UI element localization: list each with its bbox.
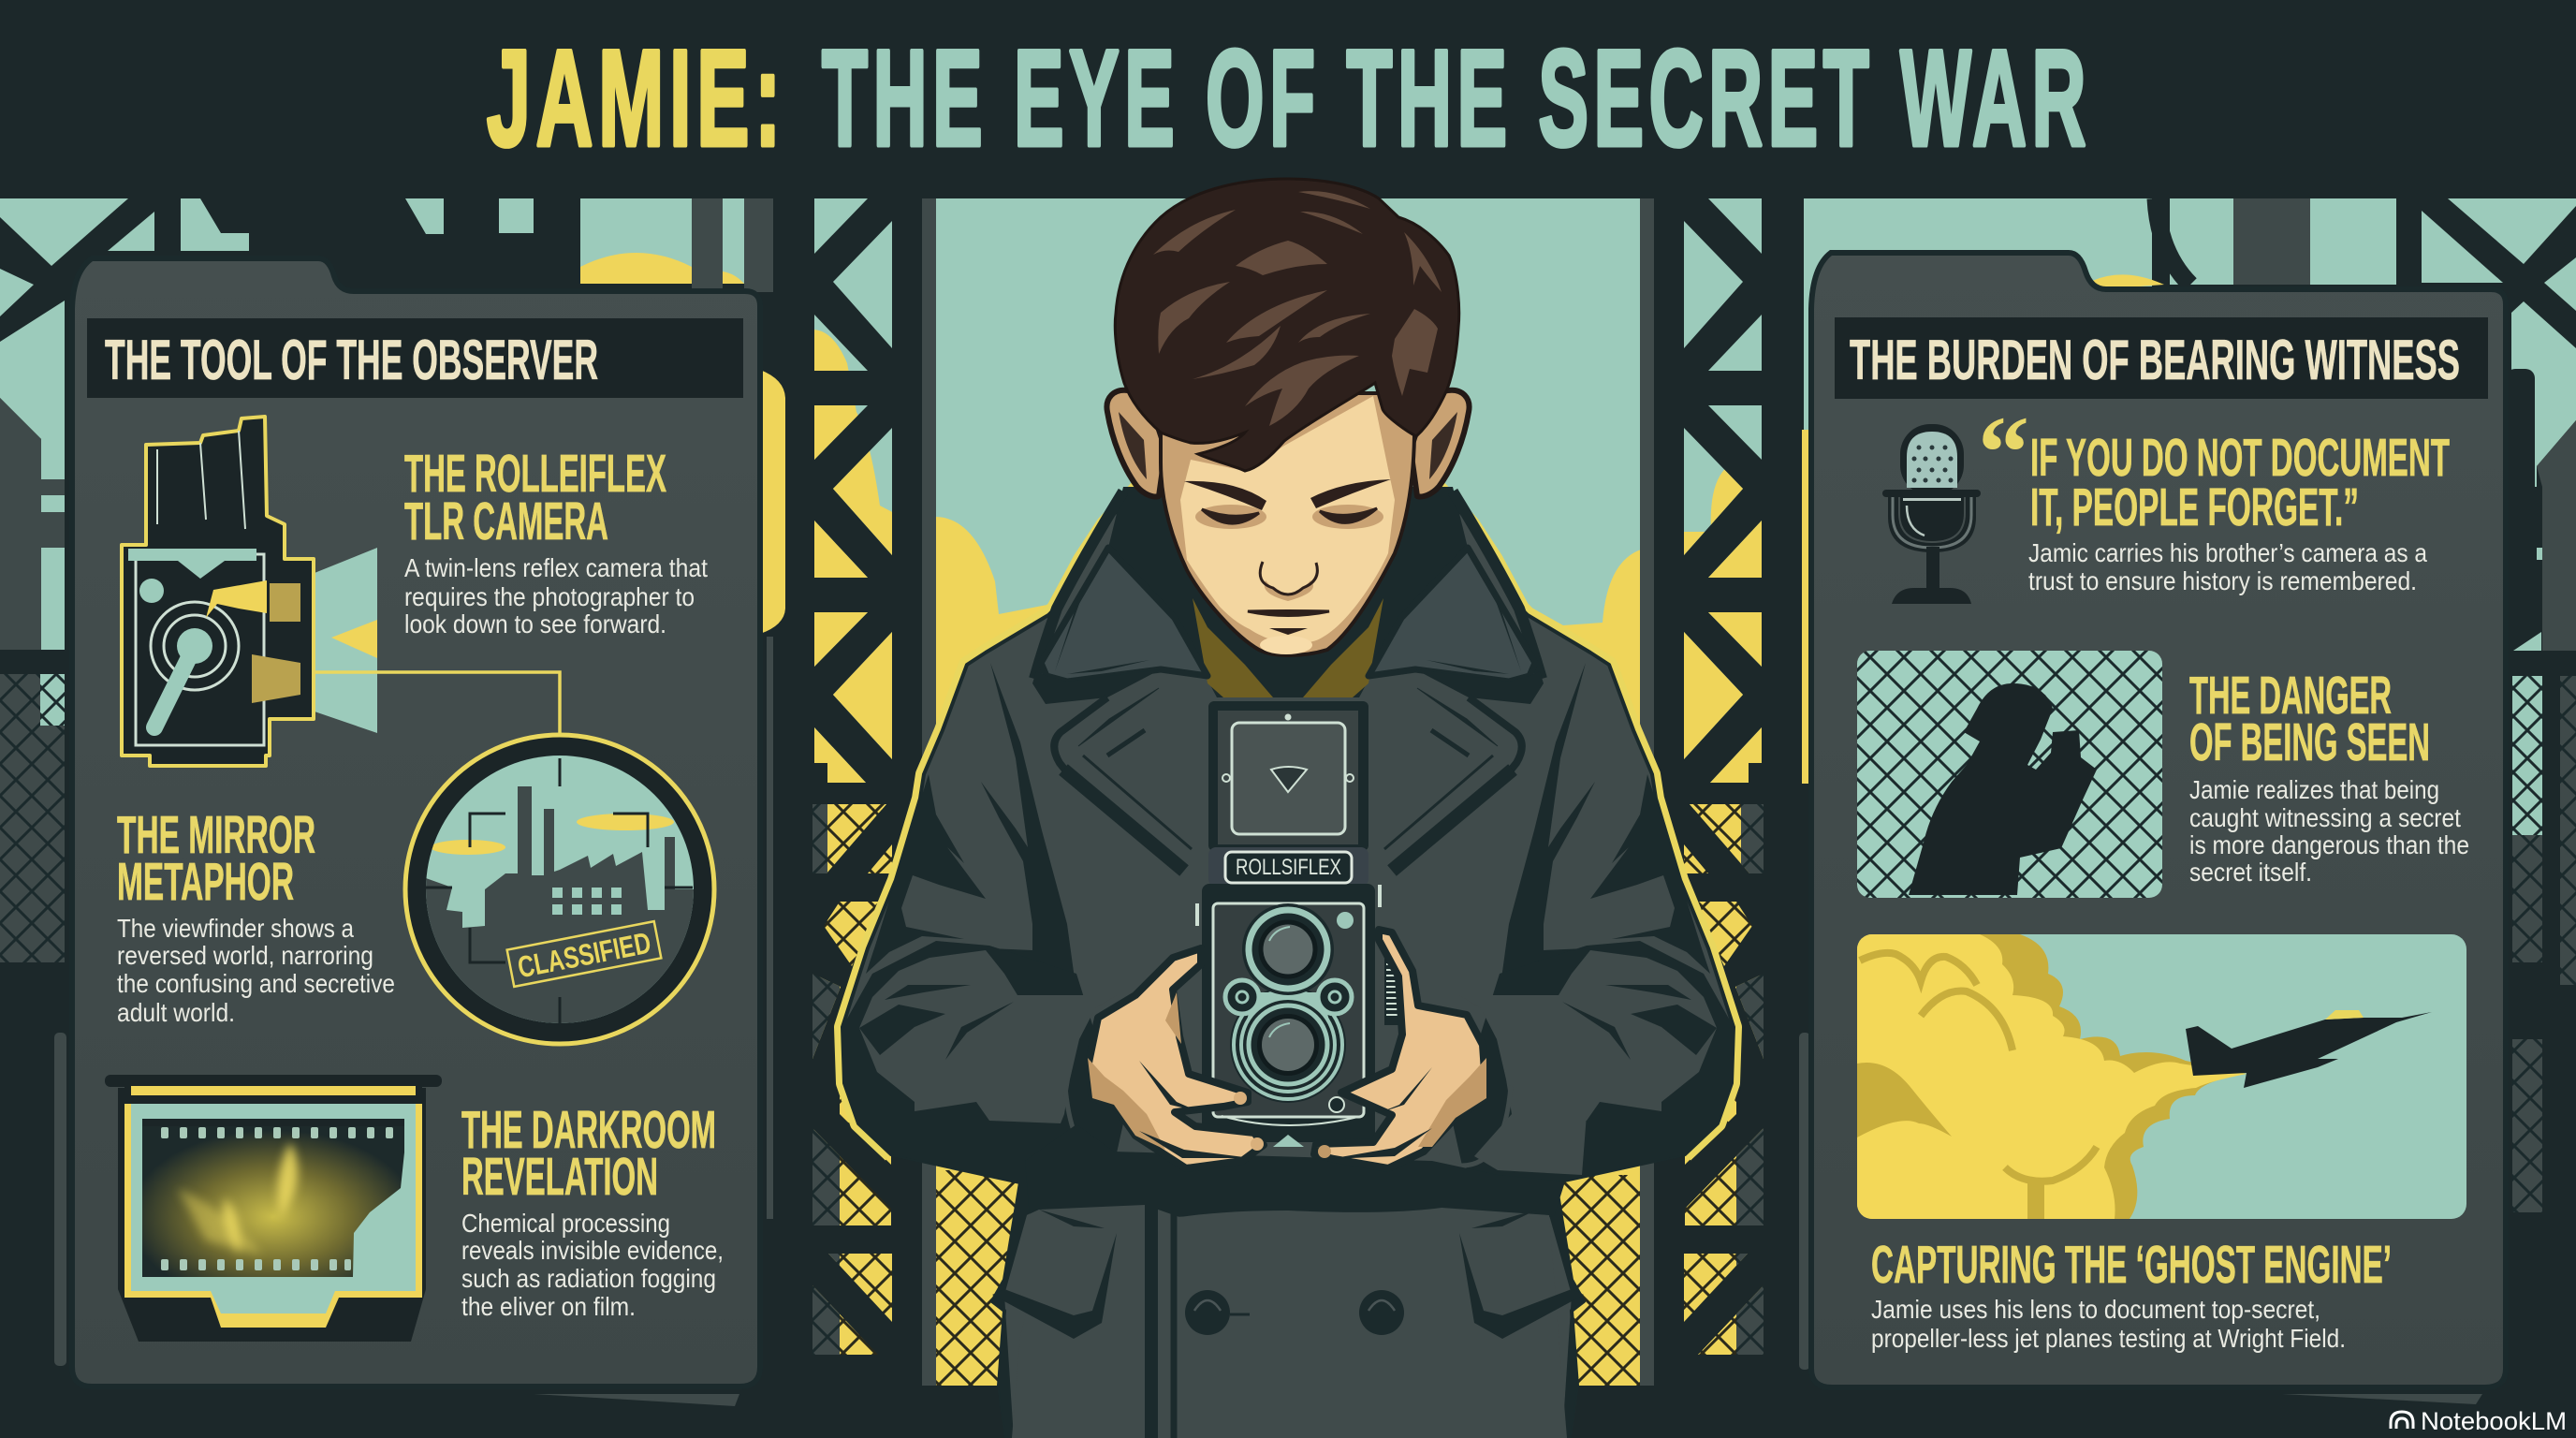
text: the mirror metaphor: the confusing and secretive <box>117 969 395 998</box>
right forearm extension <box>1474 1114 1587 1175</box>
Rolleiflex camera: ROLLSIFLEX <box>1236 855 1341 880</box>
text: the mirror metaphor: reversed world, narroring <box>117 941 373 970</box>
quote: Jamic carries his brother’s camera as a <box>2028 538 2427 567</box>
viewfinder circle with factory <box>405 735 714 1044</box>
NotebookLM logo: NotebookLM <box>2421 1407 2567 1435</box>
text: darkroom revelation: Chemical processing <box>461 1209 670 1238</box>
icon: darkroom tray with film <box>105 1075 442 1342</box>
background: right industrial scene <box>1799 198 2576 1370</box>
icon: microphone <box>1882 424 1981 604</box>
title: JAMIE: <box>487 22 786 174</box>
text: the danger: THE DANGER <box>2189 666 2392 726</box>
coat details: left <box>842 492 1208 1438</box>
lower coat <box>992 1205 1584 1438</box>
panel: the burden of bearing witness <box>1811 253 2506 1387</box>
text: the Rolleiflex: requires the photographer to <box>404 582 695 611</box>
text: the Rolleiflex: A twin-lens reflex camera that <box>404 553 708 582</box>
pockets <box>992 1210 1117 1339</box>
face <box>1161 393 1414 655</box>
background: left industrial scene <box>0 198 773 1366</box>
chin highlight <box>1260 636 1312 654</box>
panel: the tool of the observer <box>72 258 785 1387</box>
coat details: right mirror <box>1368 492 1734 1438</box>
eyelid shadows <box>1195 505 1383 529</box>
folder body <box>1811 253 2506 1387</box>
left hand <box>1088 948 1264 1168</box>
background: central sky <box>936 198 1640 1172</box>
section heading <box>87 318 743 398</box>
quote <box>1978 395 2450 595</box>
text: capturing the ghost engine: Jamie uses his lens to document top-secret, <box>1871 1295 2320 1324</box>
text: the danger: caught witnessing a secret <box>2189 803 2461 832</box>
text: the danger: is more dangerous than the <box>2189 830 2469 859</box>
coat silhouette <box>842 489 1734 1438</box>
text: the mirror metaphor: adult world. <box>117 998 235 1027</box>
ears <box>1106 390 1470 497</box>
eyebrows <box>1184 479 1391 510</box>
illustration: jet with yellow exhaust cloud <box>1857 934 2466 1219</box>
text: the danger: Jamie realizes that being <box>2189 775 2439 804</box>
text: the Rolleiflex: TLR CAMERA <box>404 492 608 551</box>
cloud shadow <box>1857 934 2247 1219</box>
text: the Rolleiflex: look down to see forward. <box>404 609 666 638</box>
text: darkroom revelation <box>461 1100 724 1321</box>
text: capturing the ghost engine: propeller-less jet planes testing at Wright Field. <box>1871 1324 2346 1353</box>
background: yellow smoke clouds <box>935 517 1641 1180</box>
connector line <box>315 672 560 735</box>
Rolleiflex camera <box>1195 701 1402 1147</box>
section heading <box>1835 317 2488 399</box>
steel lattice tower: right <box>1684 198 1764 1355</box>
elbow fold <box>866 774 986 974</box>
cloud folds <box>1860 953 2097 1219</box>
waist shadow band <box>1025 1124 1565 1217</box>
text: the mirror metaphor: The viewfinder shows a <box>117 914 354 943</box>
background: steel tower strips <box>922 198 1654 1386</box>
text: the danger: secret itself. <box>2189 858 2312 887</box>
camera lenses <box>1225 903 1352 1103</box>
text: capturing the ghost engine <box>1871 1235 2392 1353</box>
nose <box>1260 562 1317 601</box>
text: darkroom revelation: such as radiation fogging <box>461 1264 716 1293</box>
main fold <box>981 663 1076 992</box>
section heading: THE TOOL OF THE OBSERVER <box>105 329 598 391</box>
text: the mirror metaphor: THE MIRROR <box>117 805 315 865</box>
text: the mirror metaphor: METAPHOR <box>117 852 294 912</box>
sleeve underside shadow <box>842 941 1123 1438</box>
illustration: silhouette behind chain-link fence <box>1857 651 2162 898</box>
shirt collar <box>1193 598 1383 697</box>
quote: IT, PEOPLE FORGET.” <box>2030 477 2359 537</box>
quote: “ <box>1978 395 2029 509</box>
face highlight <box>1180 396 1395 643</box>
mouth <box>1248 610 1329 635</box>
folder body <box>72 258 760 1387</box>
text: the danger <box>2189 666 2469 887</box>
right hand <box>1314 930 1486 1168</box>
sleeve creases <box>859 985 1014 1060</box>
under-panel wedge left <box>534 1394 739 1406</box>
jet aircraft <box>2186 1010 2432 1088</box>
eyes closed <box>1202 508 1377 523</box>
text: the mirror metaphor <box>117 805 395 1027</box>
hair <box>1115 179 1459 471</box>
coat buttons <box>1185 1290 1404 1335</box>
camera nameplate <box>1225 852 1352 883</box>
text: darkroom revelation: reveals invisible evidence, <box>461 1236 724 1265</box>
background: yellow fence panels <box>933 1170 1643 1386</box>
cloud body <box>1857 934 2247 1219</box>
hair highlights <box>1153 191 1442 426</box>
folder tab yellow <box>760 370 785 634</box>
under-panel wedge right <box>2282 1394 2482 1404</box>
classified stamp: CLASSIFIED <box>515 926 653 984</box>
text: the Rolleiflex <box>404 444 708 638</box>
text: darkroom revelation: THE DARKROOM <box>461 1100 716 1160</box>
icon: TLR camera with light cone <box>122 417 377 766</box>
title <box>487 22 2091 174</box>
central figure: Jamie with camera <box>842 179 1734 1438</box>
coat yellow outline <box>842 489 1734 1154</box>
neck and collar interior <box>1108 487 1468 697</box>
text: the Rolleiflex: THE ROLLEIFLEX <box>404 444 666 504</box>
forearm <box>859 950 1117 1123</box>
steel lattice tower: left <box>812 198 892 1355</box>
text: darkroom revelation: REVELATION <box>461 1147 658 1207</box>
text: darkroom revelation: the eliver on film. <box>461 1292 636 1321</box>
quote: trust to ensure history is remembered. <box>2028 566 2417 595</box>
placket <box>1145 1205 1158 1438</box>
